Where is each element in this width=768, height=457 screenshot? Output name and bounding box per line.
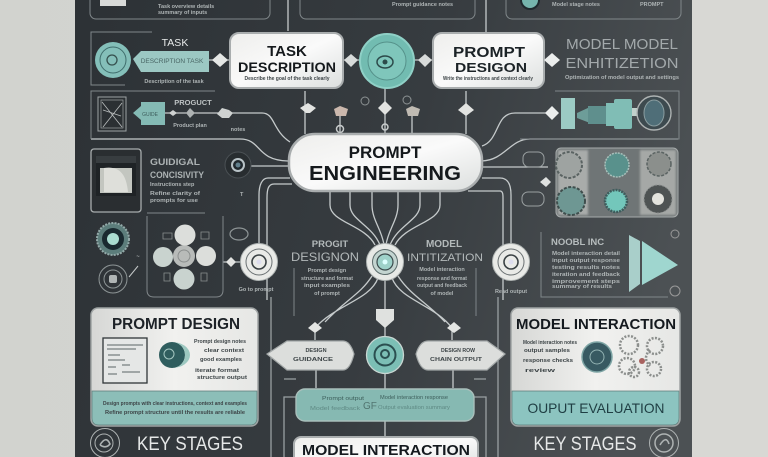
- main title: prompt engineering: [289, 134, 482, 191]
- icon: hub gear: [97, 223, 129, 255]
- footer right: key stages: [534, 428, 678, 457]
- icon: centre ring node: [366, 244, 404, 280]
- bar: teal detail: Output evaluation summary: [378, 405, 451, 411]
- card: prompt design: Prompt design notes: [194, 339, 246, 345]
- card: model interaction: [511, 308, 680, 426]
- text block: prompt design mid: PROGIT: [312, 239, 348, 250]
- tag: left arrow label: [267, 341, 354, 370]
- icon: key stages left: [90, 428, 120, 457]
- panel: model info with play icon: NOOBL INC: [551, 237, 604, 248]
- panel: icon grid: [556, 148, 678, 217]
- heading: task: TASK: [162, 37, 188, 49]
- icon: grid circle 1: [556, 152, 582, 178]
- icon: key stages right: [650, 428, 678, 457]
- panel: guidance left: Instructions step: [150, 182, 195, 188]
- card: prompt design: clear context: [204, 348, 244, 354]
- panel: model equalizer: [520, 91, 679, 139]
- footer left: key stages: [90, 428, 243, 457]
- panel: task: Description of the task: [144, 79, 205, 85]
- box: task description: DESCRIPTION: [238, 59, 336, 75]
- icon: document thumbnail: [103, 338, 147, 383]
- panel: guidance left: Refine clarity of: [150, 191, 200, 197]
- icon: connector caps: [308, 322, 461, 333]
- box: prompt design: [433, 33, 544, 88]
- panel: model info with play icon: [541, 230, 680, 297]
- tag: product: GUIDE: [142, 112, 159, 118]
- tag: task label: DESCRIPTION TASK: [141, 58, 204, 65]
- icon: knot: [217, 108, 233, 118]
- icon: top centre circle: [360, 34, 414, 88]
- heading: model optimization: Optimization of model output and settings: [565, 75, 679, 81]
- heading: model optimization: [565, 36, 679, 81]
- icon: play: [629, 235, 678, 292]
- box: task description: [230, 33, 343, 88]
- icon: outline spiral: [99, 265, 138, 293]
- panel: model info with play icon: input output response: [552, 258, 620, 264]
- panel: product row: Product plan: [173, 123, 207, 129]
- panel: model info with play icon: improvement steps: [552, 279, 620, 285]
- icon: sketch cluster: [619, 336, 663, 377]
- icon: grid circle 2: [605, 153, 629, 177]
- card: prompt design: structure output: [197, 375, 247, 381]
- panel: guidance left: prompts for use: [150, 198, 198, 204]
- panel: model info with play icon: testing results notes: [552, 265, 620, 271]
- icon: eye node: [225, 152, 251, 178]
- text block: prompt design mid: Prompt design: [308, 268, 347, 274]
- card: prompt design: good examples: [200, 357, 242, 363]
- card: model interaction: Model interaction notes: [523, 340, 577, 346]
- icon: grid circle 3: [647, 152, 671, 176]
- icon: diamond: [212, 53, 228, 67]
- text block: model interaction mid: Model interaction: [419, 267, 465, 273]
- text block: prompt design mid: of prompt: [314, 291, 340, 297]
- tag: right arrow label: DESIGN ROW: [441, 348, 476, 354]
- box: prompt design: DESIGON: [455, 61, 527, 75]
- footer right: key stages: KEY STAGES: [534, 434, 636, 455]
- icon: right ring node: [492, 244, 530, 280]
- text block: prompt design mid: input examples: [304, 283, 350, 289]
- icon: equalizer: [561, 98, 638, 129]
- tag: right arrow label: [416, 341, 505, 370]
- card: prompt design: Design prompts with clear instructions, context and examples: [103, 401, 247, 407]
- bar: teal detail: [296, 389, 474, 421]
- icon: small spiral: [230, 228, 248, 240]
- tag: product: [133, 102, 165, 125]
- text block: model interaction mid: INTITIZATION: [407, 252, 483, 264]
- panel: model info with play icon: Model interaction detail: [552, 251, 621, 257]
- text block: model interaction mid: response and format: [417, 276, 467, 282]
- icon: teal ring node: [366, 336, 404, 374]
- panel: model info with play icon: summary of results: [552, 284, 612, 290]
- connector lines: [91, 0, 678, 457]
- top row panels: PROMPT: [640, 2, 664, 8]
- panel: model info with play icon: iteration and feedback: [552, 272, 621, 278]
- icon: small badges: [522, 152, 551, 206]
- card: model interaction: output samples: [524, 348, 570, 354]
- heading: model optimization: MODEL MODEL: [566, 36, 678, 53]
- card: prompt design: [91, 308, 258, 426]
- footer left: key stages: KEY STAGES: [137, 434, 243, 455]
- tag: left arrow label: DESIGN: [305, 348, 327, 354]
- icon: diamond: [544, 53, 560, 67]
- tag: left arrow label: GUIDANCE: [293, 357, 333, 363]
- text block: model interaction mid: [407, 239, 483, 316]
- icon: grid circle 6: [644, 185, 672, 213]
- box: task description: TASK: [267, 43, 307, 60]
- box: task description: Describe the goal of the task clearly: [244, 76, 330, 82]
- icon: crossed frame: [98, 97, 126, 131]
- panel: guidance left: T: [240, 192, 244, 198]
- heading: model optimization: ENHITIZETION: [566, 55, 678, 72]
- tag: right arrow label: CHAIN OUTPUT: [430, 357, 483, 363]
- panel: guidance left: GUIDIGAL: [150, 157, 201, 167]
- top row panels: Task overview details: [158, 4, 214, 10]
- card: model interaction: response checks: [523, 358, 573, 364]
- heading: prompt design card: PROMPT DESIGN: [112, 316, 240, 333]
- top row panels: summary of inputs: [158, 10, 207, 16]
- heading: model interaction card: MODEL INTERACTION: [516, 316, 676, 333]
- text block: prompt design mid: DESIGNON: [291, 252, 359, 264]
- card: prompt design: Refine prompt structure until the results are reliable: [105, 410, 245, 416]
- box: model interaction: [294, 437, 478, 457]
- label: left ring: Go to prompt: [239, 287, 274, 293]
- card: model interaction: review: [525, 368, 556, 374]
- panel: product row: notes: [231, 127, 245, 133]
- icon: task circle: [95, 42, 131, 78]
- panel: product row: [91, 91, 245, 139]
- panel: petals: [147, 213, 223, 297]
- icon: grid circle 4: [557, 187, 585, 215]
- text: ~: [136, 254, 140, 260]
- box: prompt design: Write the instructions and context clearly: [443, 76, 534, 82]
- card: prompt design: iterate format: [195, 368, 239, 374]
- icon: diamond: [418, 54, 432, 67]
- panel: product row: PROGUCT: [174, 98, 212, 107]
- icons: connector nodes: [300, 96, 474, 132]
- panel: guidance left: CONCISIVITY: [150, 170, 204, 180]
- text block: prompt design mid: [291, 239, 359, 316]
- main title: prompt engineering: PROMPT: [349, 143, 422, 162]
- panel: guidance left: [91, 149, 251, 212]
- icon: image frame: [91, 149, 141, 212]
- main title: prompt engineering: ENGINEERING: [309, 163, 461, 185]
- text block: model interaction mid: MODEL: [426, 239, 462, 250]
- top row panels: [90, 0, 681, 19]
- text block: model interaction mid: output and feedback: [417, 283, 468, 289]
- bar: teal detail: Model feedback: [310, 406, 361, 412]
- top row panels: Model stage notes: [552, 2, 600, 8]
- bar: teal detail: GF: [363, 401, 377, 412]
- icon: teal disc: [159, 342, 190, 368]
- bar: teal detail: Model interaction response: [380, 395, 448, 401]
- icon: model eye circle: [637, 96, 671, 130]
- heading: output evaluation: OUPUT EVALUATION: [528, 400, 664, 416]
- icon: left ring node: [240, 244, 278, 280]
- label: right ring: Read output: [495, 289, 527, 295]
- icon: grid circle 5: [605, 190, 627, 212]
- icon: output shield: [376, 309, 394, 328]
- bar: teal detail: Prompt output: [322, 396, 365, 402]
- text block: prompt design mid: structure and format: [301, 276, 353, 282]
- text block: model interaction mid: of model: [431, 291, 454, 297]
- icon: diamond: [344, 54, 358, 67]
- top row panels: Prompt guidance notes: [392, 2, 453, 8]
- icon: dark disc: [582, 342, 612, 372]
- panel: task: [91, 32, 209, 85]
- box: prompt design: PROMPT: [453, 44, 525, 61]
